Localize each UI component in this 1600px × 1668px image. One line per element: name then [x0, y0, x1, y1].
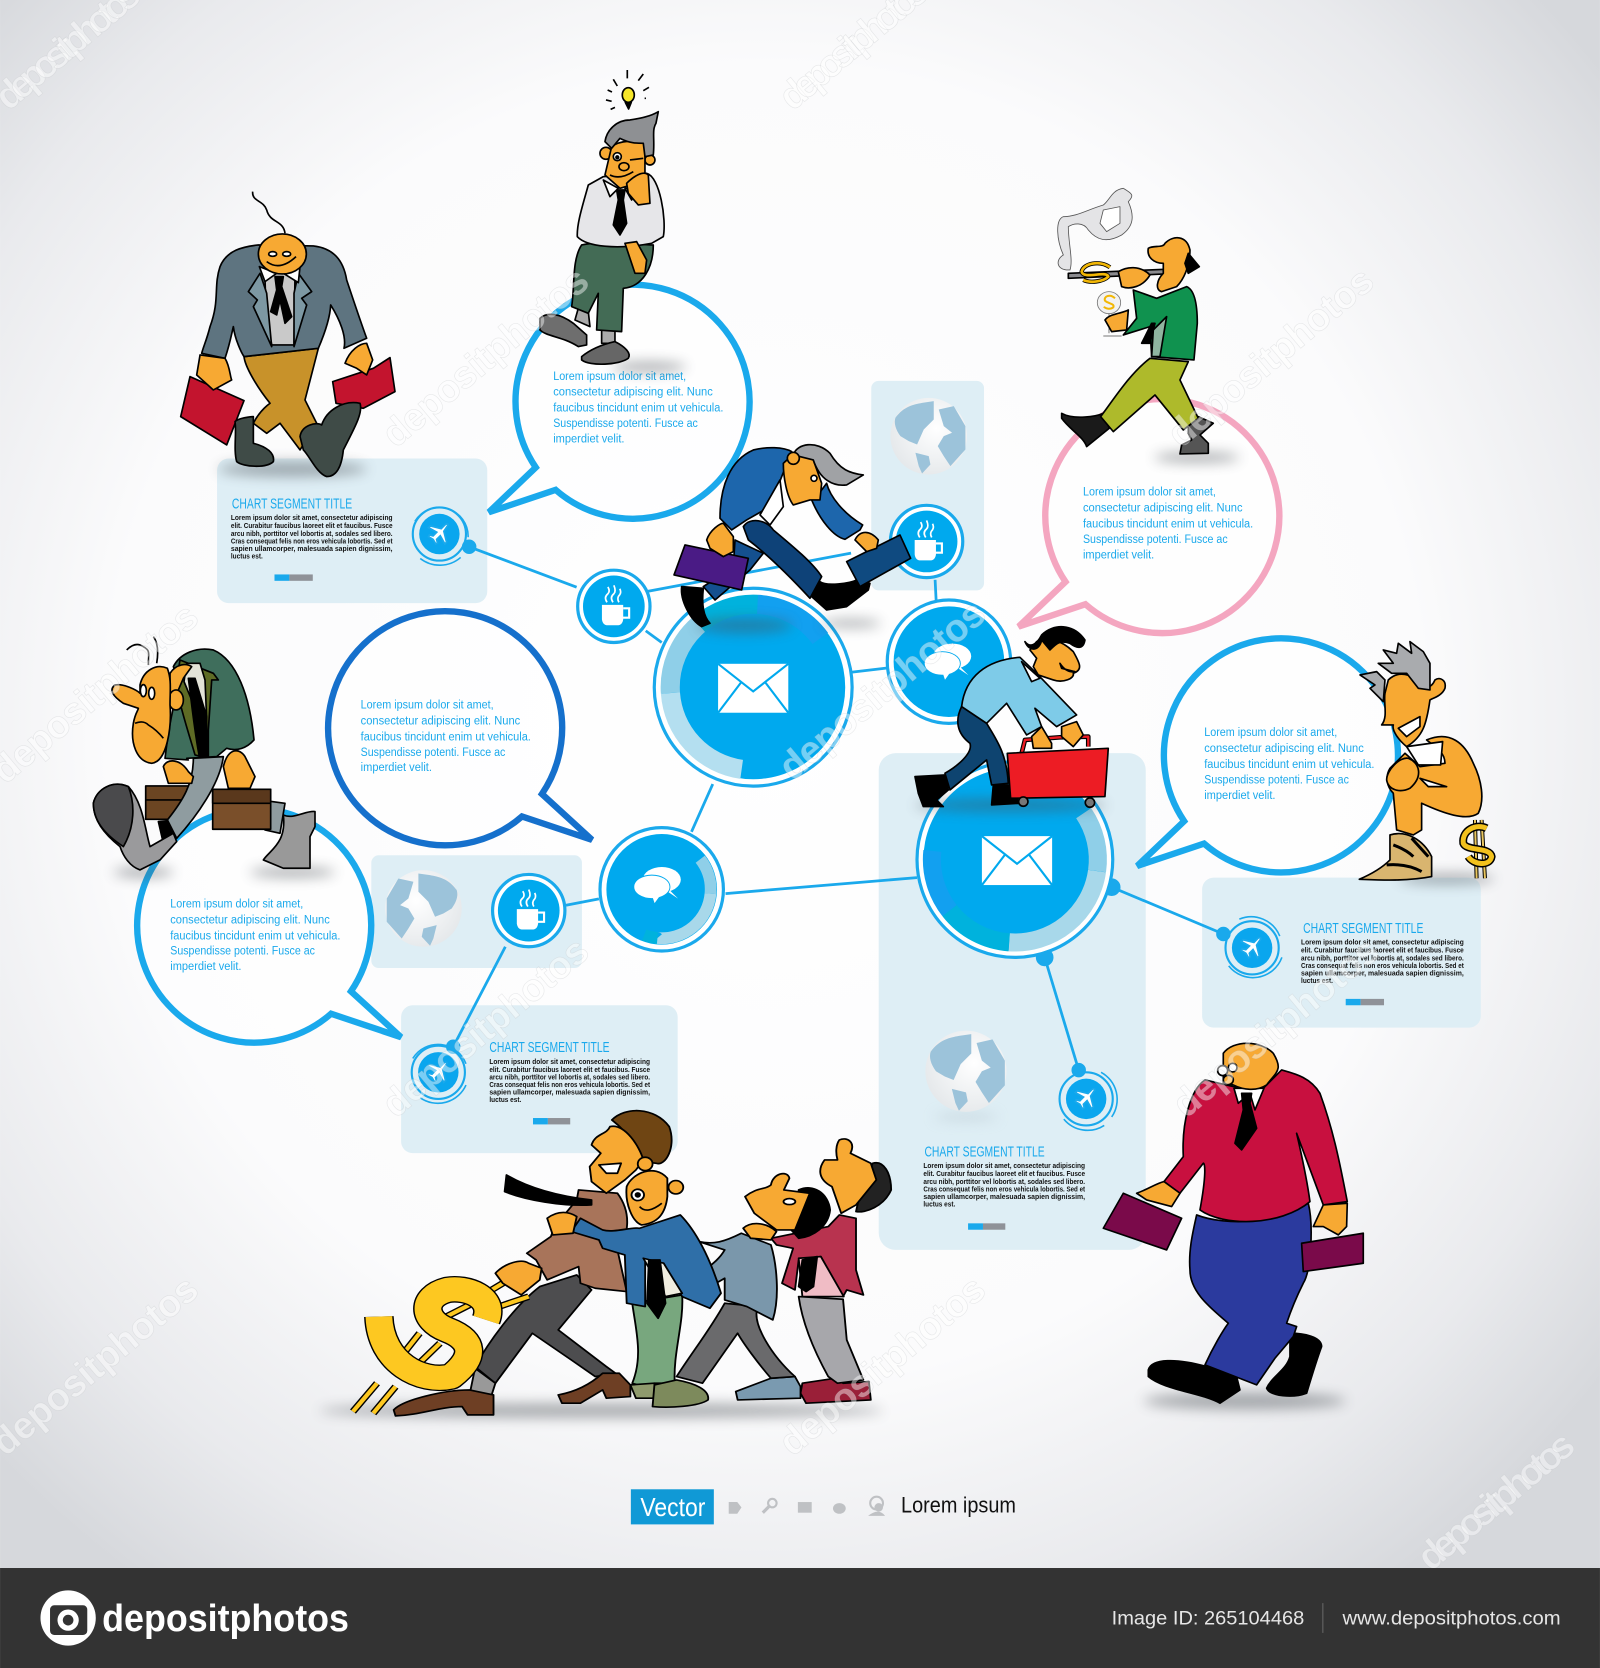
- node: chat upper: [887, 600, 1011, 723]
- bubble text: Lorem ipsum dolor sit amet,: [553, 369, 686, 383]
- bubble text: imperdiet velit.: [1083, 547, 1154, 561]
- panel title: CHART SEGMENT TITLE: [1303, 921, 1423, 937]
- progress bar: [1346, 999, 1384, 1005]
- bubble text: imperdiet velit.: [553, 432, 624, 446]
- panel: chart segment right: [1202, 878, 1481, 1028]
- watermarks: depositphotos: [1409, 1423, 1583, 1579]
- speech bubble: top: [489, 285, 750, 519]
- legend icons: [729, 1497, 885, 1516]
- bubble text: consectetur adipiscing elit. Nunc: [553, 385, 713, 399]
- watermarks: depositphotos: [374, 929, 597, 1126]
- panel body text: Lorem ipsum dolor sit amet, consectetur adipiscing: [923, 1161, 1085, 1170]
- bubble text: Lorem ipsum dolor sit amet,: [1083, 485, 1216, 499]
- panel body text: elit. Curabitur faucibus laoreet elit et faucibus. Fusce: [1301, 946, 1464, 955]
- globe icon: [925, 1031, 1007, 1121]
- man pulling front: brown jacket: [394, 1111, 672, 1416]
- character: running man with two bags: [674, 445, 911, 627]
- smoke: [1058, 188, 1132, 270]
- bubble text: [1204, 725, 1374, 802]
- connector lines: [447, 541, 1229, 1076]
- panel body text: Lorem ipsum dolor sit amet, consectetur adipiscing: [231, 513, 393, 522]
- panel body text: [1301, 938, 1464, 985]
- icon: plane: [429, 524, 448, 544]
- footer logo icon: [40, 1590, 96, 1646]
- watermarks: depositphotos: [771, 592, 994, 789]
- node: plane lower: [412, 1044, 466, 1103]
- bubble text: imperdiet velit.: [1204, 788, 1276, 802]
- footer brand name: depositphotos: [102, 1597, 349, 1640]
- panel body text: Cras consequat felis non eros vehicula lobortis. Sed et: [231, 537, 393, 546]
- panel body text: sapien ullamcorper, malesuada sapien dignissim,: [489, 1088, 650, 1097]
- panel body text: Cras consequat felis non eros vehicula lobortis. Sed et: [1301, 961, 1464, 970]
- icon: plane: [1075, 1089, 1095, 1109]
- bubble text: consectetur adipiscing elit. Nunc: [1204, 741, 1364, 755]
- bubble text: [170, 896, 340, 973]
- bubble text: faucibus tincidunt enim ut vehicula.: [361, 729, 531, 743]
- man pulling rear: pink jacket: [771, 1139, 891, 1403]
- panel body text: [489, 1057, 651, 1104]
- icon: chat bubbles: [924, 644, 971, 680]
- panel title: CHART SEGMENT TITLE: [924, 1144, 1045, 1160]
- panel body text: elit. Curabitur faucibus laoreet elit et faucibus. Fusce: [231, 521, 393, 530]
- panel body text: sapien ullamcorper, malesuada sapien dignissim,: [923, 1192, 1085, 1201]
- bubble text: Lorem ipsum dolor sit amet,: [170, 896, 303, 910]
- icon: coffee cup: [602, 585, 629, 625]
- character: sitting old man with moneybag: [1359, 642, 1492, 880]
- panel title: CHART SEGMENT TITLE: [232, 496, 352, 512]
- speech bubble: pink: [1019, 399, 1279, 633]
- globe icon: [890, 398, 967, 474]
- speech bubble: lower left: [137, 809, 401, 1043]
- node: coffee left: [578, 570, 650, 643]
- panel: tall chart segment: [879, 753, 1146, 1250]
- icon: coffee cup: [915, 520, 942, 560]
- character: strong man with red bags: [181, 192, 395, 477]
- bubble text: Suspendisse potenti. Fusce ac: [361, 745, 505, 759]
- panel body text: arcu nibh, porttitor vel lobortis at, sodales sed libero.: [923, 1177, 1085, 1186]
- bubble text: imperdiet velit.: [170, 959, 242, 973]
- panel body text: elit. Curabitur faucibus laoreet elit et faucibus. Fusce: [923, 1169, 1086, 1178]
- globe icon: [385, 870, 462, 947]
- man pulling: blue jacket: [630, 1295, 708, 1407]
- progress bar: [968, 1223, 1005, 1230]
- bubble text: Suspendisse potenti. Fusce ac: [553, 416, 698, 430]
- bubble text: Lorem ipsum dolor sit amet,: [1204, 725, 1337, 739]
- node: plane top left: [413, 507, 468, 565]
- panel body text: [231, 513, 393, 560]
- man pulling: gray jacket: [664, 1174, 830, 1400]
- panel: left small globe: [371, 855, 582, 968]
- panel body text: arcu nibh, porttitor vel lobortis at, sodales sed libero.: [489, 1073, 650, 1082]
- panel body text: elit. Curabitur faucibus laoreet elit et faucibus. Fusce: [489, 1065, 651, 1074]
- legend bar: [631, 1489, 1016, 1524]
- bubble text: consectetur adipiscing elit. Nunc: [1083, 501, 1243, 515]
- node: chat lower: [593, 821, 730, 958]
- bubble text: Lorem ipsum dolor sit amet,: [361, 697, 494, 711]
- legend text: Lorem ipsum: [901, 1493, 1016, 1518]
- progress bar: [533, 1118, 570, 1124]
- panel body text: Lorem ipsum dolor sit amet, consectetur adipiscing: [489, 1057, 650, 1066]
- blue jacket torso and head: [571, 1171, 721, 1318]
- watermarks: depositphotos: [1164, 929, 1388, 1126]
- bubble text: [361, 697, 531, 774]
- speech bubble: dark blue: [328, 611, 592, 845]
- panel title: CHART SEGMENT TITLE: [489, 1040, 610, 1056]
- bubble text: faucibus tincidunt enim ut vehicula.: [553, 401, 723, 415]
- panel body text: Cras consequat felis non eros vehicula lobortis. Sed et: [923, 1184, 1085, 1193]
- bubble text: Suspendisse potenti. Fusce ac: [1083, 532, 1228, 546]
- character shadows: [114, 362, 1495, 1418]
- icon: envelope: [982, 836, 1052, 885]
- node: plane tall panel: [1060, 1072, 1117, 1130]
- icon: coffee cup: [517, 890, 544, 930]
- hands on the dollar: [495, 1212, 577, 1295]
- watermarks: depositphotos: [771, 1267, 994, 1464]
- panel body text: Cras consequat felis non eros vehicula lobortis. Sed et: [489, 1080, 650, 1089]
- character: big man in red sweater: [1103, 1043, 1363, 1403]
- node: coffee right: [890, 505, 963, 578]
- panel body text: luctus est.: [923, 1199, 955, 1208]
- vector label: [631, 1489, 714, 1524]
- panel body text: luctus est.: [489, 1095, 521, 1104]
- panel body text: Lorem ipsum dolor sit amet, consectetur adipiscing: [1301, 938, 1464, 947]
- panel: top small globe: [871, 381, 984, 590]
- panel body text: arcu nibh, porttitor vel lobortis at, sodales sed libero.: [1301, 954, 1464, 963]
- icon: envelope: [718, 664, 788, 713]
- bubble text: imperdiet velit.: [361, 760, 432, 774]
- character: smoker with dollar cigar: [1058, 188, 1213, 454]
- progress bar: [274, 574, 313, 581]
- bubble text: faucibus tincidunt enim ut vehicula.: [1204, 757, 1374, 771]
- node: coffee lower: [493, 874, 565, 947]
- bubble text: Suspendisse potenti. Fusce ac: [1204, 772, 1349, 786]
- bubble text: [1083, 485, 1253, 561]
- icon: plane: [427, 1062, 447, 1082]
- image id: Image ID: 265104468: [1112, 1608, 1304, 1629]
- character: man pushing red case: [915, 627, 1108, 807]
- icon: light bulb: [606, 70, 649, 109]
- bubble text: [553, 369, 723, 446]
- icon: plane: [1241, 938, 1261, 958]
- panel body text: luctus est.: [231, 551, 263, 560]
- character: thinker with light bulb: [540, 70, 664, 364]
- character group: tug of war with dollar sign: [353, 1111, 891, 1416]
- bubble text: consectetur adipiscing elit. Nunc: [361, 713, 520, 727]
- panel body text: luctus est.: [1301, 976, 1333, 985]
- node: plane right: [1226, 917, 1282, 978]
- panel body text: [923, 1161, 1086, 1208]
- bubble text: consectetur adipiscing elit. Nunc: [170, 912, 330, 926]
- icon: giant dollar sign: [353, 1277, 529, 1413]
- icon: chat bubbles: [634, 867, 681, 903]
- footer website: www.depositphotos.com: [1341, 1608, 1561, 1629]
- watermarks: depositphotos: [374, 259, 597, 456]
- speech bubble: right: [1137, 638, 1398, 872]
- node: big mail lower: [898, 743, 1131, 976]
- footer bar: [0, 1568, 1600, 1668]
- vector label: Vector: [640, 1494, 706, 1522]
- watermarks: depositphotos: [1159, 259, 1382, 456]
- bubble text: faucibus tincidunt enim ut vehicula.: [170, 928, 340, 942]
- bubble text: Suspendisse potenti. Fusce ac: [170, 944, 315, 958]
- bubble text: faucibus tincidunt enim ut vehicula.: [1083, 517, 1253, 531]
- character: hunched man with brown briefcases: [93, 637, 315, 870]
- panel body text: arcu nibh, porttitor vel lobortis at, sodales sed libero.: [231, 529, 393, 538]
- panel: chart segment top left: [217, 458, 487, 603]
- panel body text: sapien ullamcorper, malesuada sapien dignissim,: [231, 544, 393, 553]
- panel: chart segment bottom left: [401, 1005, 678, 1153]
- node: big mail top: [636, 570, 870, 804]
- panel body text: sapien ullamcorper, malesuada sapien dignissim,: [1301, 968, 1464, 977]
